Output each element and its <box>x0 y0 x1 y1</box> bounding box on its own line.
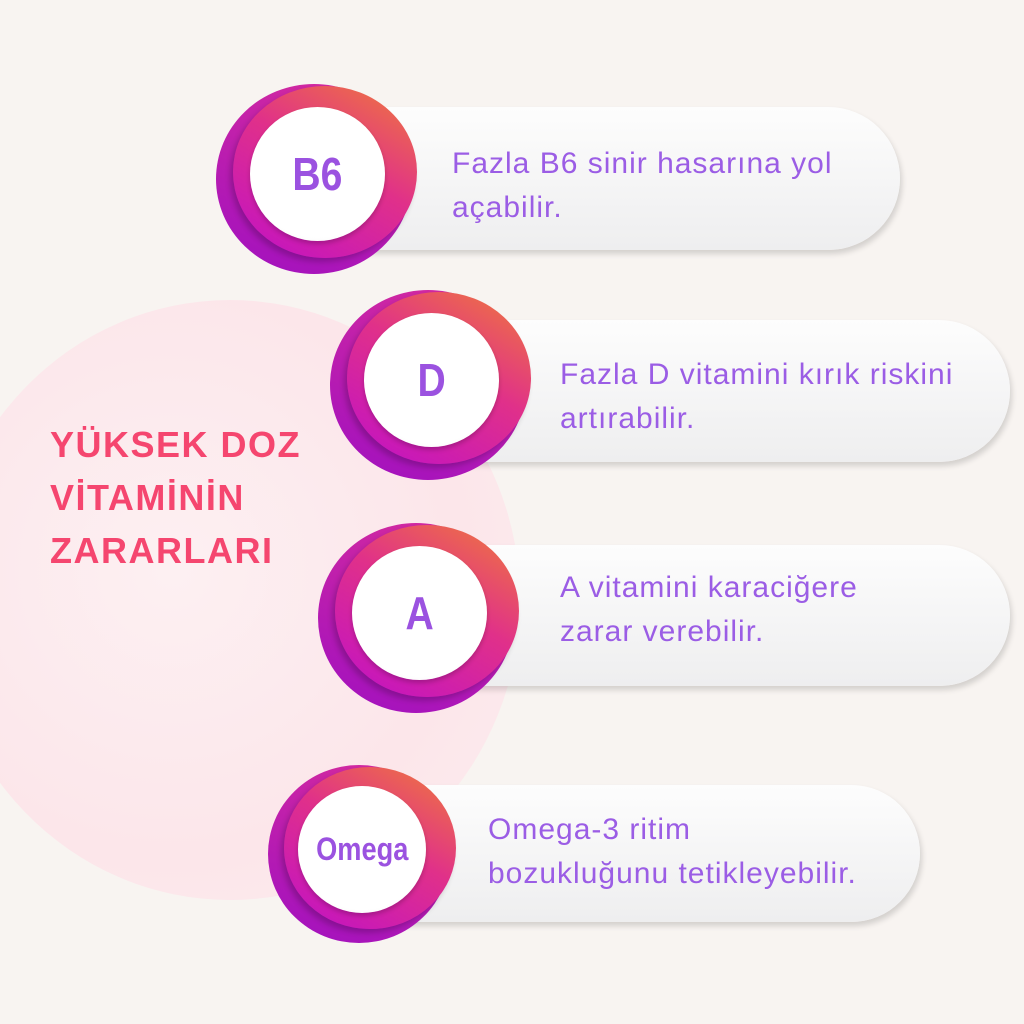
text: Omega <box>488 813 857 890</box>
text: D: Fazla D vitamini kırık riskini <box>560 358 953 391</box>
title <box>50 424 301 571</box>
icon: D circle <box>330 290 531 480</box>
pill: Omega text panel <box>350 785 920 922</box>
row: Omega <box>268 765 924 943</box>
icon: B6 circle <box>216 84 417 274</box>
row: D <box>330 290 1014 480</box>
icon: D circle: D <box>417 354 446 406</box>
title: VİTAMİNİN <box>50 477 245 518</box>
pill: A text panel <box>420 545 1010 686</box>
pill: B6 text panel <box>300 107 900 250</box>
text: B6: Fazla B6 sinir hasarına yol <box>452 147 832 180</box>
pill: D text panel <box>420 320 1010 462</box>
text: Omega: Omega-3 ritim <box>488 813 691 846</box>
text: D <box>560 358 953 435</box>
icon: A circle <box>318 523 519 713</box>
text: B6: açabilir. <box>452 191 563 224</box>
text: Omega: bozukluğunu tetikleyebilir. <box>488 857 857 890</box>
text: B6 <box>452 147 832 224</box>
icon: Omega circle: Omega <box>316 831 408 867</box>
text: A: A vitamini karaciğere <box>560 571 858 604</box>
text: A: zarar verebilir. <box>560 615 764 648</box>
icon: A circle: A <box>405 587 434 639</box>
icon: Omega circle <box>268 765 456 943</box>
icon: B6 circle: B6 <box>293 148 342 200</box>
row: B6 <box>216 84 904 274</box>
text: D: artırabilir. <box>560 402 695 435</box>
title: ZARARLARI <box>50 530 273 571</box>
title: YÜKSEK DOZ <box>50 424 301 465</box>
text: A <box>560 571 858 648</box>
row: A <box>318 523 1014 713</box>
